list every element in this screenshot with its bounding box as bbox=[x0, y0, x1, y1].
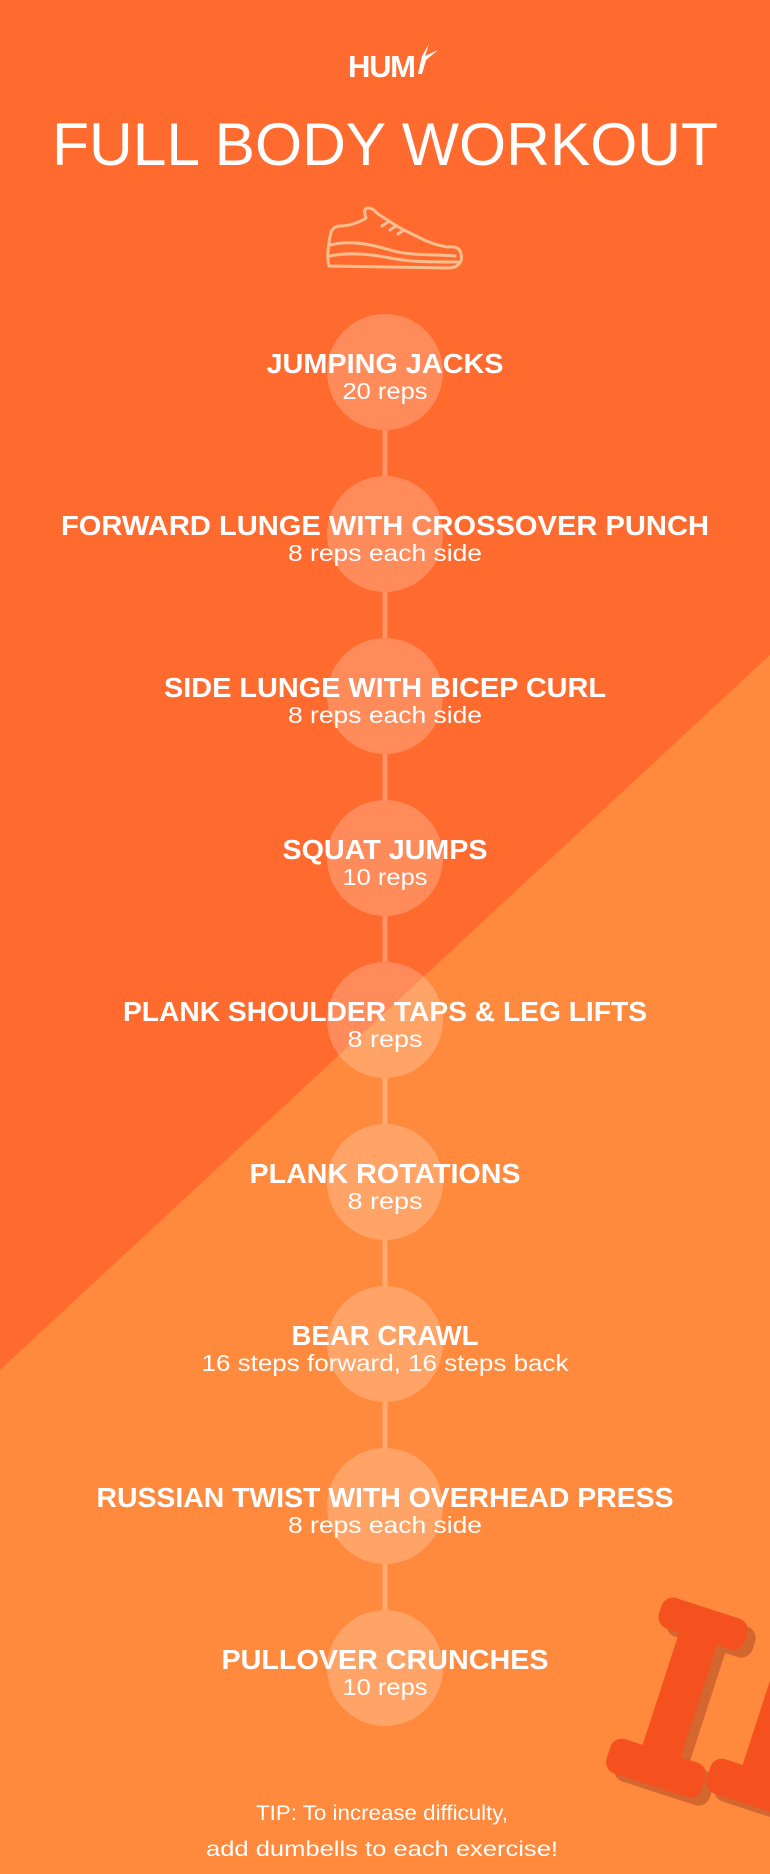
step 9: pullover crunches: 10 reps bbox=[342, 1674, 428, 1700]
tip text bbox=[206, 1802, 558, 1861]
step 5: plank shoulder taps bbox=[123, 962, 647, 1078]
step 6: plank rotations: PLANK ROTATIONS bbox=[250, 1158, 520, 1189]
step 4: squat jumps: 10 reps bbox=[342, 864, 428, 890]
step 2: forward lunge: 8 reps each side bbox=[288, 540, 482, 566]
step 3: side lunge bbox=[164, 638, 606, 754]
step 5: plank shoulder taps: PLANK SHOULDER TAPS & LEG LIFTS bbox=[123, 996, 647, 1027]
step 3: side lunge: 8 reps each side bbox=[288, 702, 482, 728]
step 6: plank rotations bbox=[250, 1124, 520, 1240]
icon: dumbbells bbox=[603, 1593, 770, 1830]
tip text: TIP: To increase difficulty, bbox=[256, 1802, 508, 1825]
step 9: pullover crunches bbox=[222, 1610, 548, 1726]
step 2: forward lunge bbox=[61, 476, 709, 592]
step 1: jumping jacks: 20 reps bbox=[342, 378, 428, 404]
step 2: forward lunge: FORWARD LUNGE WITH CROSSOVER PUNCH bbox=[61, 510, 709, 541]
logo: HUM bbox=[348, 44, 438, 84]
step 4: squat jumps: SQUAT JUMPS bbox=[282, 834, 488, 865]
step 8: russian twist: RUSSIAN TWIST WITH OVERHEAD PRESS bbox=[96, 1482, 674, 1513]
step 8: russian twist bbox=[96, 1448, 674, 1564]
step 1: jumping jacks bbox=[266, 314, 504, 430]
icon: sneaker bbox=[328, 208, 461, 268]
step 6: plank rotations: 8 reps bbox=[348, 1188, 422, 1214]
tip text: add dumbells to each exercise! bbox=[206, 1838, 558, 1861]
step 1: jumping jacks: JUMPING JACKS bbox=[266, 348, 504, 379]
title: FULL BODY WORKOUT bbox=[52, 111, 718, 178]
step 7: bear crawl bbox=[202, 1286, 569, 1402]
step 4: squat jumps bbox=[282, 800, 488, 916]
timeline connector bbox=[382, 430, 388, 1610]
logo: HUM: HUM bbox=[348, 49, 416, 84]
step 3: side lunge: SIDE LUNGE WITH BICEP CURL bbox=[164, 672, 606, 703]
step 7: bear crawl: BEAR CRAWL bbox=[292, 1320, 478, 1351]
step 5: plank shoulder taps: 8 reps bbox=[348, 1026, 422, 1052]
step 7: bear crawl: 16 steps forward, 16 steps back bbox=[202, 1350, 569, 1376]
step 9: pullover crunches: PULLOVER CRUNCHES bbox=[222, 1644, 548, 1675]
step 8: russian twist: 8 reps each side bbox=[288, 1512, 482, 1538]
